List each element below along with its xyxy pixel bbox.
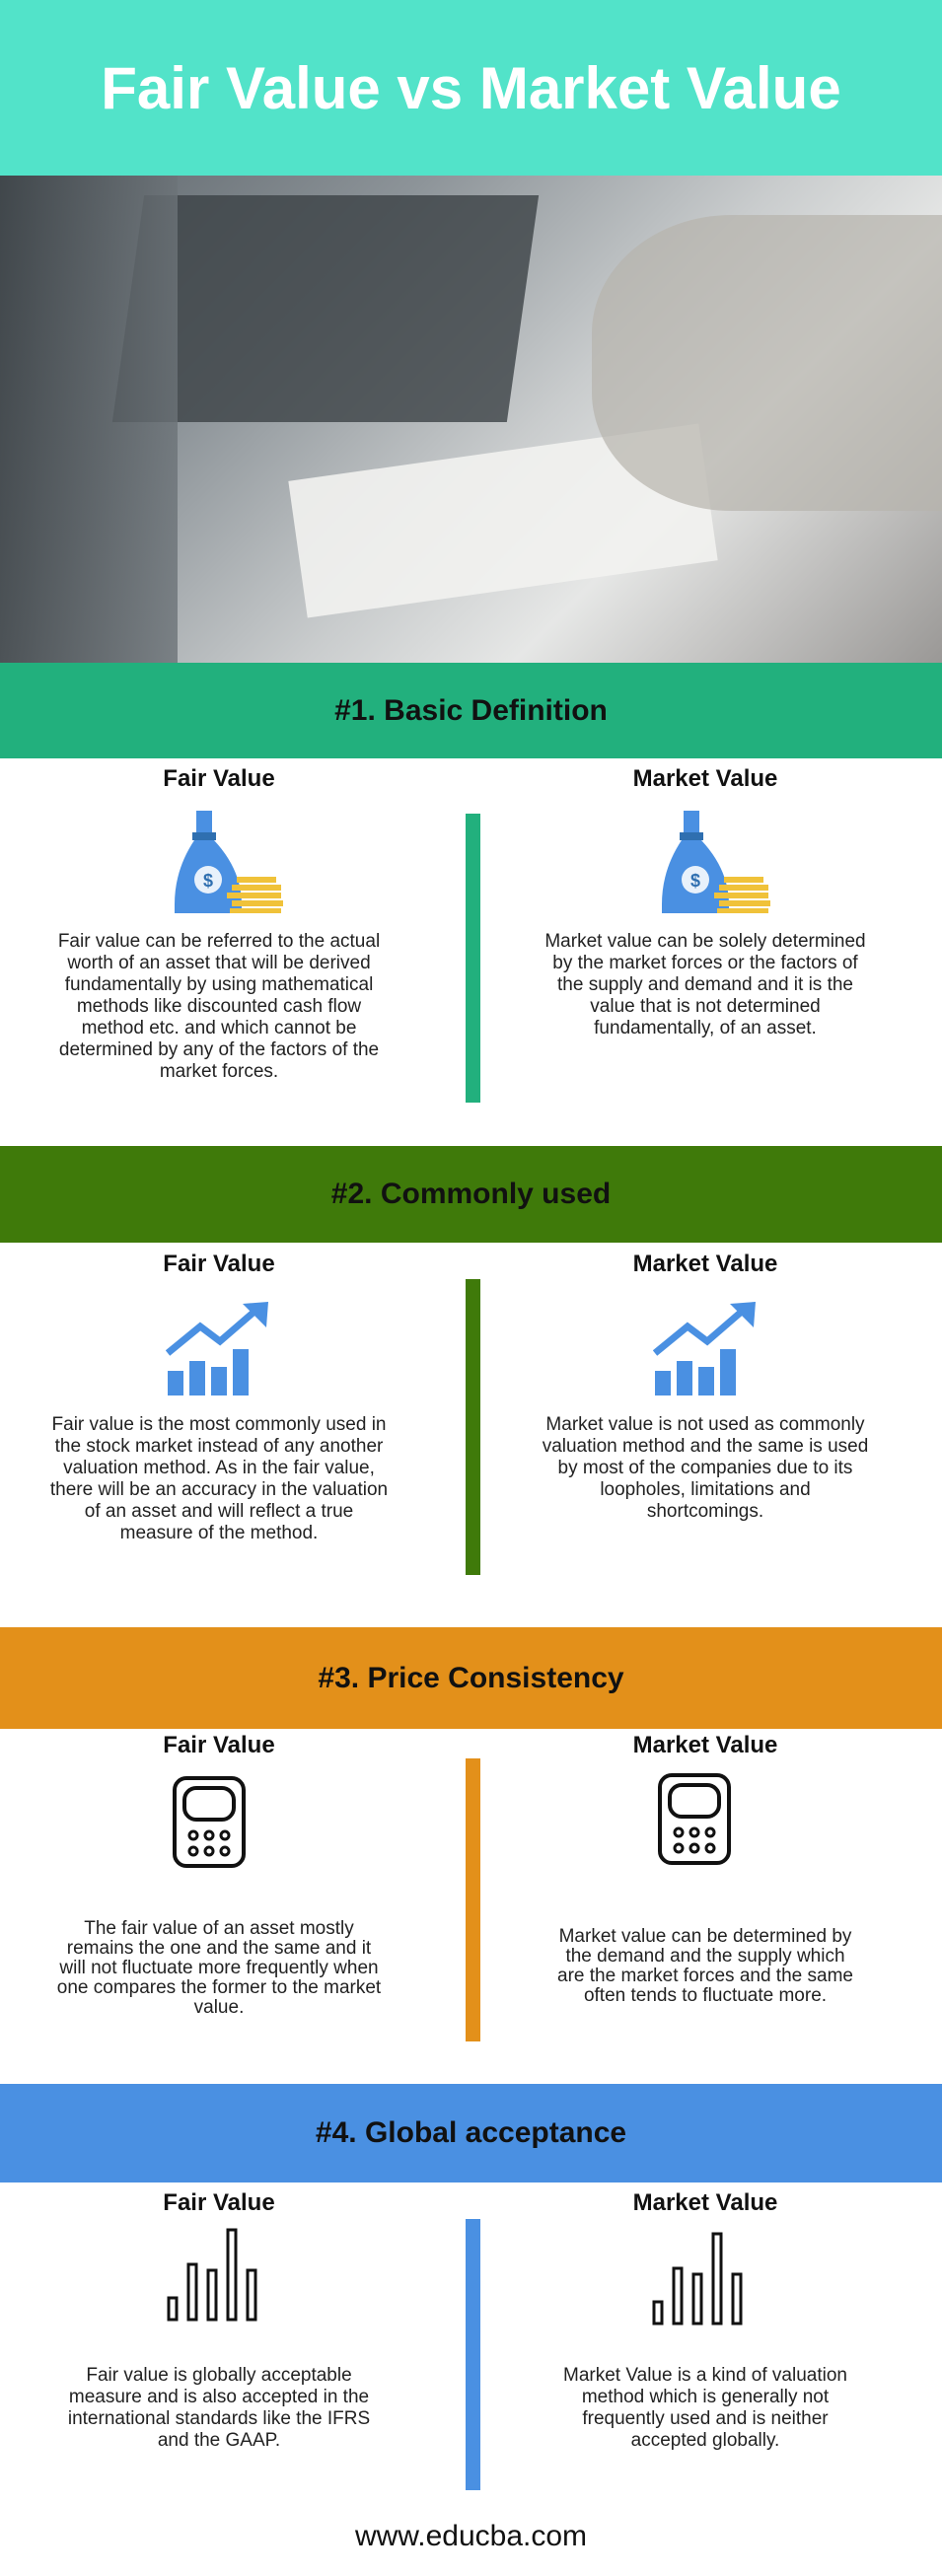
- s3 fair text: remains the one and the same and it: [67, 1938, 371, 1959]
- title banner: [0, 0, 942, 176]
- section 4 header: [0, 2084, 942, 2182]
- s3 market text: are the market forces and the same: [557, 1966, 853, 1986]
- s1 market text: [544, 931, 866, 1038]
- s1 fair text: Fair value can be referred to the actual: [58, 931, 380, 952]
- s4 fair text: measure and is also accepted in the: [69, 2387, 369, 2407]
- s3 fair text: one compares the former to the market: [57, 1977, 381, 1998]
- icon: calculator left: [173, 1776, 246, 1868]
- s1 market heading: Market Value: [633, 765, 777, 792]
- s1 market text: fundamentally, of an asset.: [594, 1018, 817, 1038]
- s4 fair text: [68, 2365, 370, 2451]
- s2 market text: Market value is not used as commonly: [545, 1414, 865, 1435]
- section 3 header: #3. Price Consistency: [318, 1661, 624, 1694]
- s1 divider: [466, 814, 480, 1103]
- s2 fair text: there will be an accuracy in the valuation: [50, 1479, 388, 1500]
- s4 market heading: Market Value: [633, 2189, 777, 2216]
- s1 market text: value that is not determined: [590, 996, 821, 1017]
- section 1 header: #1. Basic Definition: [334, 694, 608, 726]
- s3 market text: [557, 1926, 853, 2006]
- s3 market text: Market value can be determined by: [559, 1926, 851, 1947]
- s1 fair heading: Fair Value: [163, 765, 275, 792]
- s3 fair text: value.: [194, 1997, 244, 2018]
- s2 market heading: Market Value: [633, 1251, 777, 1277]
- s4 market text: [563, 2365, 847, 2451]
- s2 market text: valuation method and the same is used: [543, 1436, 868, 1457]
- s1 fair text: fundamentally by using mathematical: [65, 974, 373, 995]
- s3 fair text: [57, 1918, 381, 2018]
- s2 fair text: of an asset and will reflect a true: [85, 1501, 353, 1522]
- section 2 header: #2. Commonly used: [331, 1178, 611, 1210]
- s2 divider: [466, 1279, 480, 1575]
- section 2 header: [0, 1146, 942, 1243]
- s4 market text: frequently used and is neither: [582, 2408, 829, 2429]
- s2 fair text: the stock market instead of any another: [55, 1436, 383, 1457]
- photo: laptop desk: [0, 176, 942, 663]
- s2 fair heading: Fair Value: [163, 1251, 275, 1277]
- s1 fair text: [58, 931, 380, 1082]
- s1 fair text: methods like discounted cash flow: [77, 996, 361, 1017]
- s4 fair text: and the GAAP.: [158, 2430, 280, 2451]
- s2 market text: shortcomings.: [647, 1501, 763, 1522]
- s1 fair text: determined by any of the factors of the: [59, 1039, 379, 1060]
- s2 fair text: Fair value is the most commonly used in: [52, 1414, 386, 1435]
- s4 market text: Market Value is a kind of valuation: [563, 2365, 847, 2386]
- s1 market text: Market value can be solely determined: [544, 931, 866, 952]
- s4 market text: method which is generally not: [582, 2387, 829, 2407]
- icon: bar chart left: [168, 2229, 256, 2322]
- s4 divider: [466, 2219, 480, 2490]
- s2 market text: by most of the companies due to its: [558, 1458, 852, 1478]
- icon: bar chart right: [653, 2233, 742, 2326]
- s4 fair heading: Fair Value: [163, 2189, 275, 2216]
- section 3 header: [0, 1627, 942, 1729]
- s1 market text: by the market forces or the factors of: [552, 953, 858, 973]
- s2 fair text: valuation method. As in the fair value,: [63, 1458, 375, 1478]
- s2 market text: loopholes, limitations and: [600, 1479, 811, 1500]
- s1 fair text: market forces.: [160, 1061, 278, 1082]
- s2 fair text: [50, 1414, 388, 1543]
- s4 fair text: international standards like the IFRS: [68, 2408, 370, 2429]
- s3 market text: the demand and the supply which: [565, 1946, 845, 1967]
- s2 fair text: measure of the method.: [120, 1523, 318, 1543]
- s2 market text: [543, 1414, 868, 1522]
- footer url: www.educba.com: [355, 2520, 587, 2552]
- s3 fair text: The fair value of an asset mostly: [84, 1918, 354, 1939]
- s4 fair text: Fair value is globally acceptable: [86, 2365, 352, 2386]
- title banner: Fair Value vs Market Value: [101, 55, 841, 120]
- s3 divider: [466, 1758, 480, 2041]
- s3 fair heading: Fair Value: [163, 1732, 275, 1758]
- s1 fair text: method etc. and which cannot be: [82, 1018, 356, 1038]
- s4 market text: accepted globally.: [631, 2430, 779, 2451]
- icon: money bag left: [175, 811, 283, 913]
- s1 market text: the supply and demand and it is the: [557, 974, 853, 995]
- s3 fair text: will not fluctuate more frequently when: [59, 1958, 379, 1978]
- s3 market heading: Market Value: [633, 1732, 777, 1758]
- icon: growth chart right: [653, 1302, 756, 1395]
- icon: money bag left: $: [203, 871, 213, 891]
- section 1 header: [0, 663, 942, 758]
- icon: growth chart left: [166, 1302, 268, 1395]
- s1 fair text: worth of an asset that will be derived: [67, 953, 371, 973]
- icon: money bag right: [662, 811, 770, 913]
- icon: calculator right: [658, 1773, 731, 1865]
- section 4 header: #4. Global acceptance: [316, 2116, 626, 2149]
- icon: money bag right: $: [690, 871, 700, 891]
- s3 market text: often tends to fluctuate more.: [584, 1985, 827, 2006]
